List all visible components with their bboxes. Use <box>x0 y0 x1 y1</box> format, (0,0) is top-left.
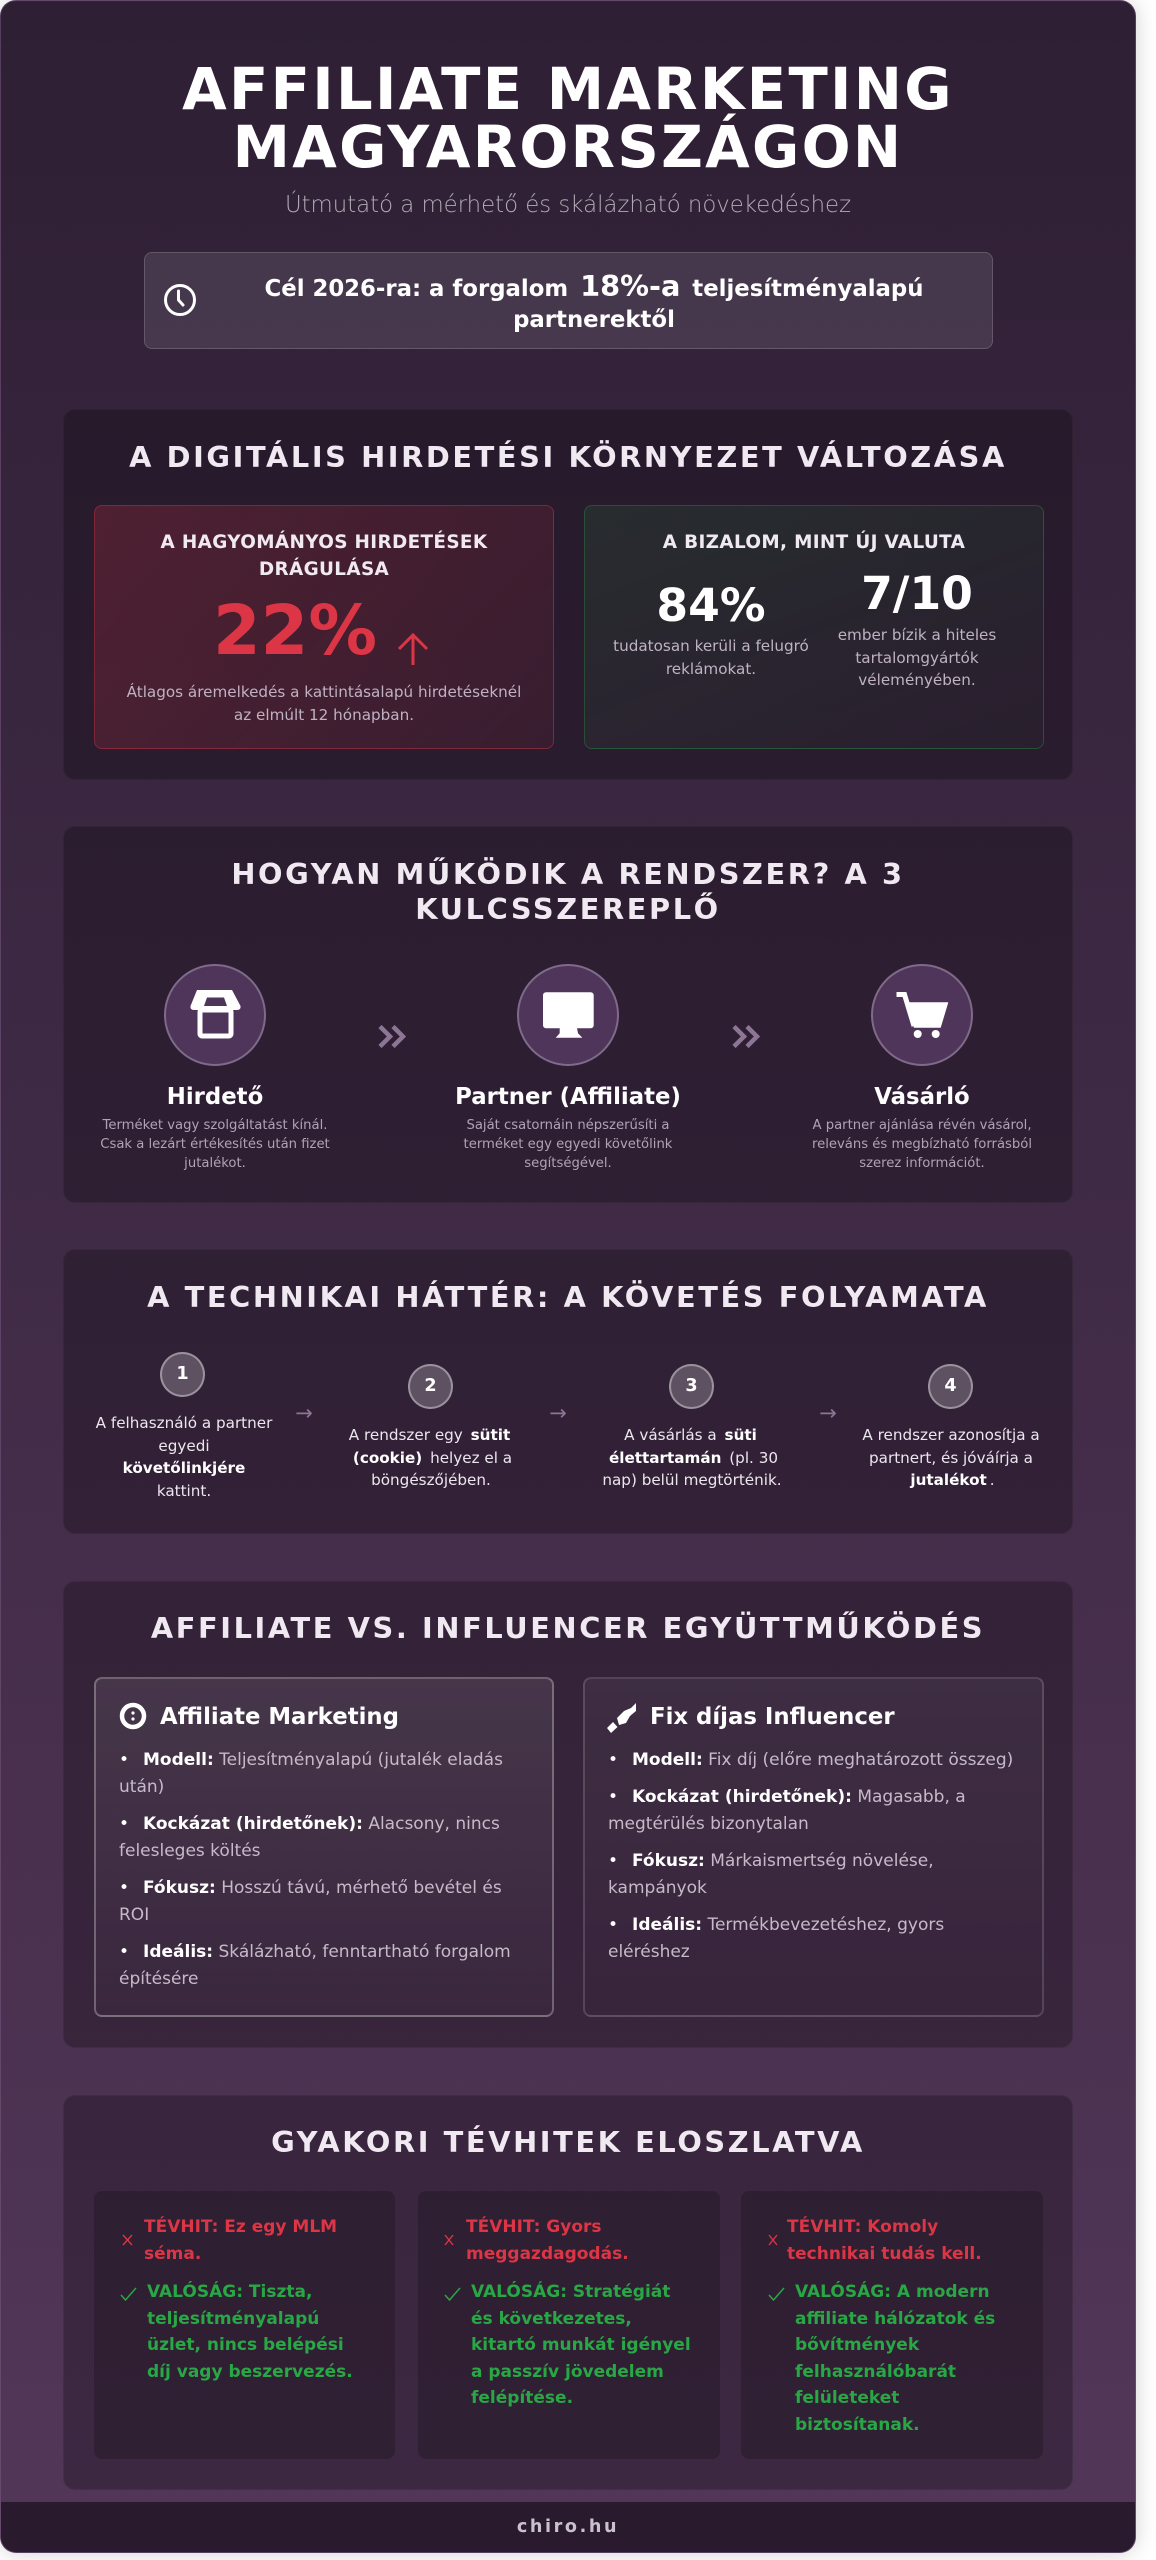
step text: élettartamán (pl. 30 <box>609 1449 778 1467</box>
step text <box>348 1426 512 1489</box>
title: MAGYARORSZÁGON <box>233 114 903 181</box>
comparison list: Ideális: Skálázható, fenntartható forgalom <box>143 1942 511 1962</box>
step number: 3 <box>685 1376 698 1396</box>
reality: teljesítményalapú <box>147 2309 319 2329</box>
myth card 1 <box>94 2191 395 2459</box>
card heading: Affiliate Marketing <box>160 1704 399 1730</box>
icon: check <box>444 2288 460 2301</box>
reality: VALÓSÁG: A modern <box>795 2282 990 2302</box>
step number: 2 <box>424 1376 437 1396</box>
icon: rocket <box>607 1703 636 1733</box>
card: fixed-fee influencer <box>583 1677 1044 2017</box>
reality: bővítmények <box>795 2335 919 2355</box>
title <box>182 56 954 181</box>
reality: biztosítanak. <box>795 2415 920 2435</box>
reality <box>471 2281 691 2408</box>
panel: common misconceptions <box>63 2095 1073 2490</box>
step text: egyedi <box>158 1437 210 1455</box>
card: affiliate marketing <box>94 1677 554 2017</box>
step text: A rendszer azonosítja a <box>862 1426 1040 1444</box>
reality: felhasználóbarát <box>795 2362 956 2382</box>
comparison list: • <box>608 1750 618 1770</box>
comparison list: • <box>119 1814 129 1834</box>
myth: TÉVHIT: Ez egy MLM <box>144 2217 337 2237</box>
reality: a passzív jövedelem <box>471 2362 664 2382</box>
icon: cross <box>122 2234 132 2246</box>
description: az elmúlt 12 hónapban. <box>234 706 414 724</box>
actor description <box>812 1118 1032 1171</box>
icon: cart <box>871 964 973 1066</box>
reality: VALÓSÁG: Stratégiát <box>471 2282 670 2302</box>
icon: monitor <box>517 964 619 1066</box>
actor description: Terméket vagy szolgáltatást kínál. <box>103 1118 327 1133</box>
icon: coin <box>120 1702 146 1730</box>
actor name: Hirdető <box>167 1084 263 1110</box>
arrow: chevrons 1 <box>378 1025 406 1048</box>
heading: GYAKORI TÉVHITEK ELOSZLATVA <box>271 2125 865 2159</box>
reality: és következetes, <box>471 2309 632 2329</box>
myth <box>787 2214 982 2267</box>
reality: kitartó munkát igényel <box>471 2335 691 2355</box>
icon: up arrow <box>398 633 428 665</box>
panel: how the system works <box>63 826 1073 1203</box>
myth card 2 <box>418 2191 720 2459</box>
step text <box>602 1426 782 1489</box>
stat: 7/10: 7/10 <box>861 567 973 620</box>
panel: digital advertising environment <box>63 409 1073 780</box>
step text: A rendszer egy sütit <box>349 1426 510 1444</box>
heading: A DIGITÁLIS HIRDETÉSI KÖRNYEZET VÁLTOZÁSA <box>129 440 1007 474</box>
card heading: A BIZALOM, MINT ÚJ VALUTA <box>663 532 965 553</box>
goal text <box>265 269 923 333</box>
actor description: jutalékot. <box>184 1156 246 1171</box>
step text: nap) belül megtörténik. <box>602 1471 782 1489</box>
comparison list: Ideális: Termékbevezetéshez, gyors <box>632 1915 944 1935</box>
step text: kattint. <box>157 1482 211 1500</box>
stat text: 7/10 <box>838 626 996 689</box>
myth: séma. <box>144 2244 201 2264</box>
goal text: Cél 2026-ra: a forgalom 18%-a teljesítményalapú <box>265 269 923 303</box>
card heading <box>160 530 488 580</box>
step number: 1 <box>176 1364 189 1384</box>
heading: AFFILIATE VS. INFLUENCER EGYÜTTMŰKÖDÉS <box>151 1611 985 1645</box>
myth: TÉVHIT: Komoly <box>787 2217 938 2237</box>
step number <box>669 1364 714 1409</box>
step text: (cookie) helyez el a <box>353 1449 512 1467</box>
goal text: partnerektől <box>513 307 675 333</box>
reality <box>147 2281 353 2382</box>
arrow: → <box>295 1401 313 1425</box>
comparison list: Kockázat (hirdetőnek): Magasabb, a <box>632 1787 966 1807</box>
actor description <box>464 1118 672 1171</box>
panel: tracking process <box>63 1249 1073 1534</box>
step text: A vásárlás a süti <box>624 1426 757 1444</box>
stat: 22%: 22% <box>213 591 377 671</box>
comparison list: • <box>608 1915 618 1935</box>
actor: affiliate <box>455 1084 681 1171</box>
actor description: segítségével. <box>524 1156 612 1171</box>
stat text: 7/10: véleményében. <box>858 671 976 689</box>
reality: felépítése. <box>471 2388 573 2408</box>
comparison list: Kockázat (hirdetőnek): Alacsony, nincs <box>143 1814 500 1834</box>
step 4 <box>862 1364 1040 1489</box>
myth: meggazdagodás. <box>466 2244 629 2264</box>
description <box>126 683 521 724</box>
card heading: A HAGYOMÁNYOS HIRDETÉSEK <box>161 532 487 553</box>
icon: cross <box>444 2234 454 2246</box>
step text <box>862 1426 1040 1489</box>
step number <box>928 1364 973 1409</box>
arrow: → <box>549 1401 567 1425</box>
comparison list: után) <box>119 1777 164 1797</box>
comparison list: Fókusz: Hosszú távú, mérhető bevétel és <box>143 1878 502 1898</box>
comparison list: ROI <box>119 1905 149 1925</box>
card: rising ad costs <box>94 505 554 749</box>
actor description: releváns és megbízható forrásból <box>812 1137 1032 1152</box>
icon: shop <box>164 964 266 1066</box>
heading <box>231 857 905 926</box>
icon: cross <box>768 2234 778 2246</box>
heading: HOGYAN MŰKÖDIK A RENDSZER? A 3 <box>231 857 905 891</box>
myth card 3 <box>741 2191 1043 2459</box>
actor description: Saját csatornáin népszerűsíti a <box>466 1118 670 1133</box>
reality <box>795 2279 995 2439</box>
stat text: 7/10: tartalomgyártók <box>855 649 979 667</box>
step number <box>408 1364 453 1409</box>
reality: díj vagy beszervezés. <box>147 2362 353 2382</box>
arrow: chevrons 2 <box>732 1025 760 1048</box>
reality: üzlet, nincs belépési <box>147 2335 344 2355</box>
comparison list: építésére <box>119 1969 198 1989</box>
step text: követőlinkjére <box>123 1459 245 1477</box>
subtitle: Útmutató a mérhető és skálázható növekedéshez <box>285 192 851 218</box>
step text: A felhasználó a partner <box>96 1414 272 1432</box>
myth <box>466 2216 629 2264</box>
comparison list: Modell: Fix díj (előre meghatározott összeg) <box>632 1750 1013 1770</box>
myth: technikai tudás kell. <box>787 2244 982 2264</box>
panel: affiliate vs influencer <box>63 1581 1073 2048</box>
stat text: 7/10: ember bízik a hiteles <box>838 626 996 644</box>
card: trust as new currency <box>584 505 1044 749</box>
goal callout <box>144 252 993 349</box>
comparison list: Modell: Teljesítményalapú (jutalék eladás <box>143 1750 503 1770</box>
step text: jutalékot. <box>910 1471 995 1489</box>
comparison list: megtérülés bizonytalan <box>608 1814 809 1834</box>
heading: KULCSSZEREPLŐ <box>415 892 721 926</box>
icon: check <box>120 2288 136 2301</box>
heading: A TECHNIKAI HÁTTÉR: A KÖVETÉS FOLYAMATA <box>147 1280 989 1314</box>
step text <box>96 1414 272 1500</box>
step number: 4 <box>944 1376 957 1396</box>
description: Átlagos áremelkedés a kattintásalapú hirdetéseknél <box>127 683 521 701</box>
step 1 <box>96 1352 272 1500</box>
icon: check <box>768 2287 785 2301</box>
title: AFFILIATE MARKETING <box>182 56 954 123</box>
step 3 <box>602 1364 782 1489</box>
comparison list: kampányok <box>608 1878 707 1898</box>
comparison list: • <box>608 1851 618 1871</box>
actor description <box>100 1118 330 1171</box>
actor: buyer <box>812 1084 1032 1171</box>
footer <box>0 2502 1136 2553</box>
comparison list <box>119 1750 511 1989</box>
comparison list: • <box>608 1787 618 1807</box>
comparison list: • <box>119 1878 129 1898</box>
card heading: DRÁGULÁSA <box>259 559 389 580</box>
card heading: Fix díjas Influencer <box>650 1704 895 1730</box>
icon: clock <box>164 284 196 316</box>
step 2 <box>348 1364 512 1489</box>
step number <box>160 1352 205 1397</box>
comparison list: • <box>119 1942 129 1962</box>
arrow: → <box>819 1401 837 1425</box>
comparison list: Fókusz: Márkaismertség növelése, <box>632 1851 934 1871</box>
stat text: 84%: tudatosan kerüli a felugró <box>613 637 809 655</box>
reality: VALÓSÁG: Tiszta, <box>147 2282 312 2302</box>
step text: partnert, és jóváírja a <box>869 1449 1033 1467</box>
reality: affiliate hálózatok és <box>795 2309 995 2329</box>
comparison list: eléréshez <box>608 1942 690 1962</box>
reality: felületeket <box>795 2388 899 2408</box>
actor description: Csak a lezárt értékesítés után fizet <box>100 1137 330 1152</box>
stat text: 84% <box>613 637 809 678</box>
actor name: Partner (Affiliate) <box>455 1084 681 1110</box>
stat: 84%: 84% <box>656 579 766 632</box>
myth <box>144 2216 337 2264</box>
actor: advertiser <box>100 1084 330 1171</box>
footer: chiro.hu <box>517 2517 619 2537</box>
actor description: terméket egy egyedi követőlink <box>464 1137 672 1152</box>
stat text: 84%: reklámokat. <box>666 660 756 678</box>
comparison list: felesleges költés <box>119 1841 261 1861</box>
actor name: Vásárló <box>874 1084 970 1110</box>
comparison list: • <box>119 1750 129 1770</box>
actor description: szerez információt. <box>859 1156 985 1171</box>
myth: TÉVHIT: Gyors <box>466 2217 602 2237</box>
step text: böngészőjében. <box>371 1471 491 1489</box>
actor description: A partner ajánlása révén vásárol, <box>812 1118 1032 1133</box>
comparison list <box>608 1750 1013 1962</box>
